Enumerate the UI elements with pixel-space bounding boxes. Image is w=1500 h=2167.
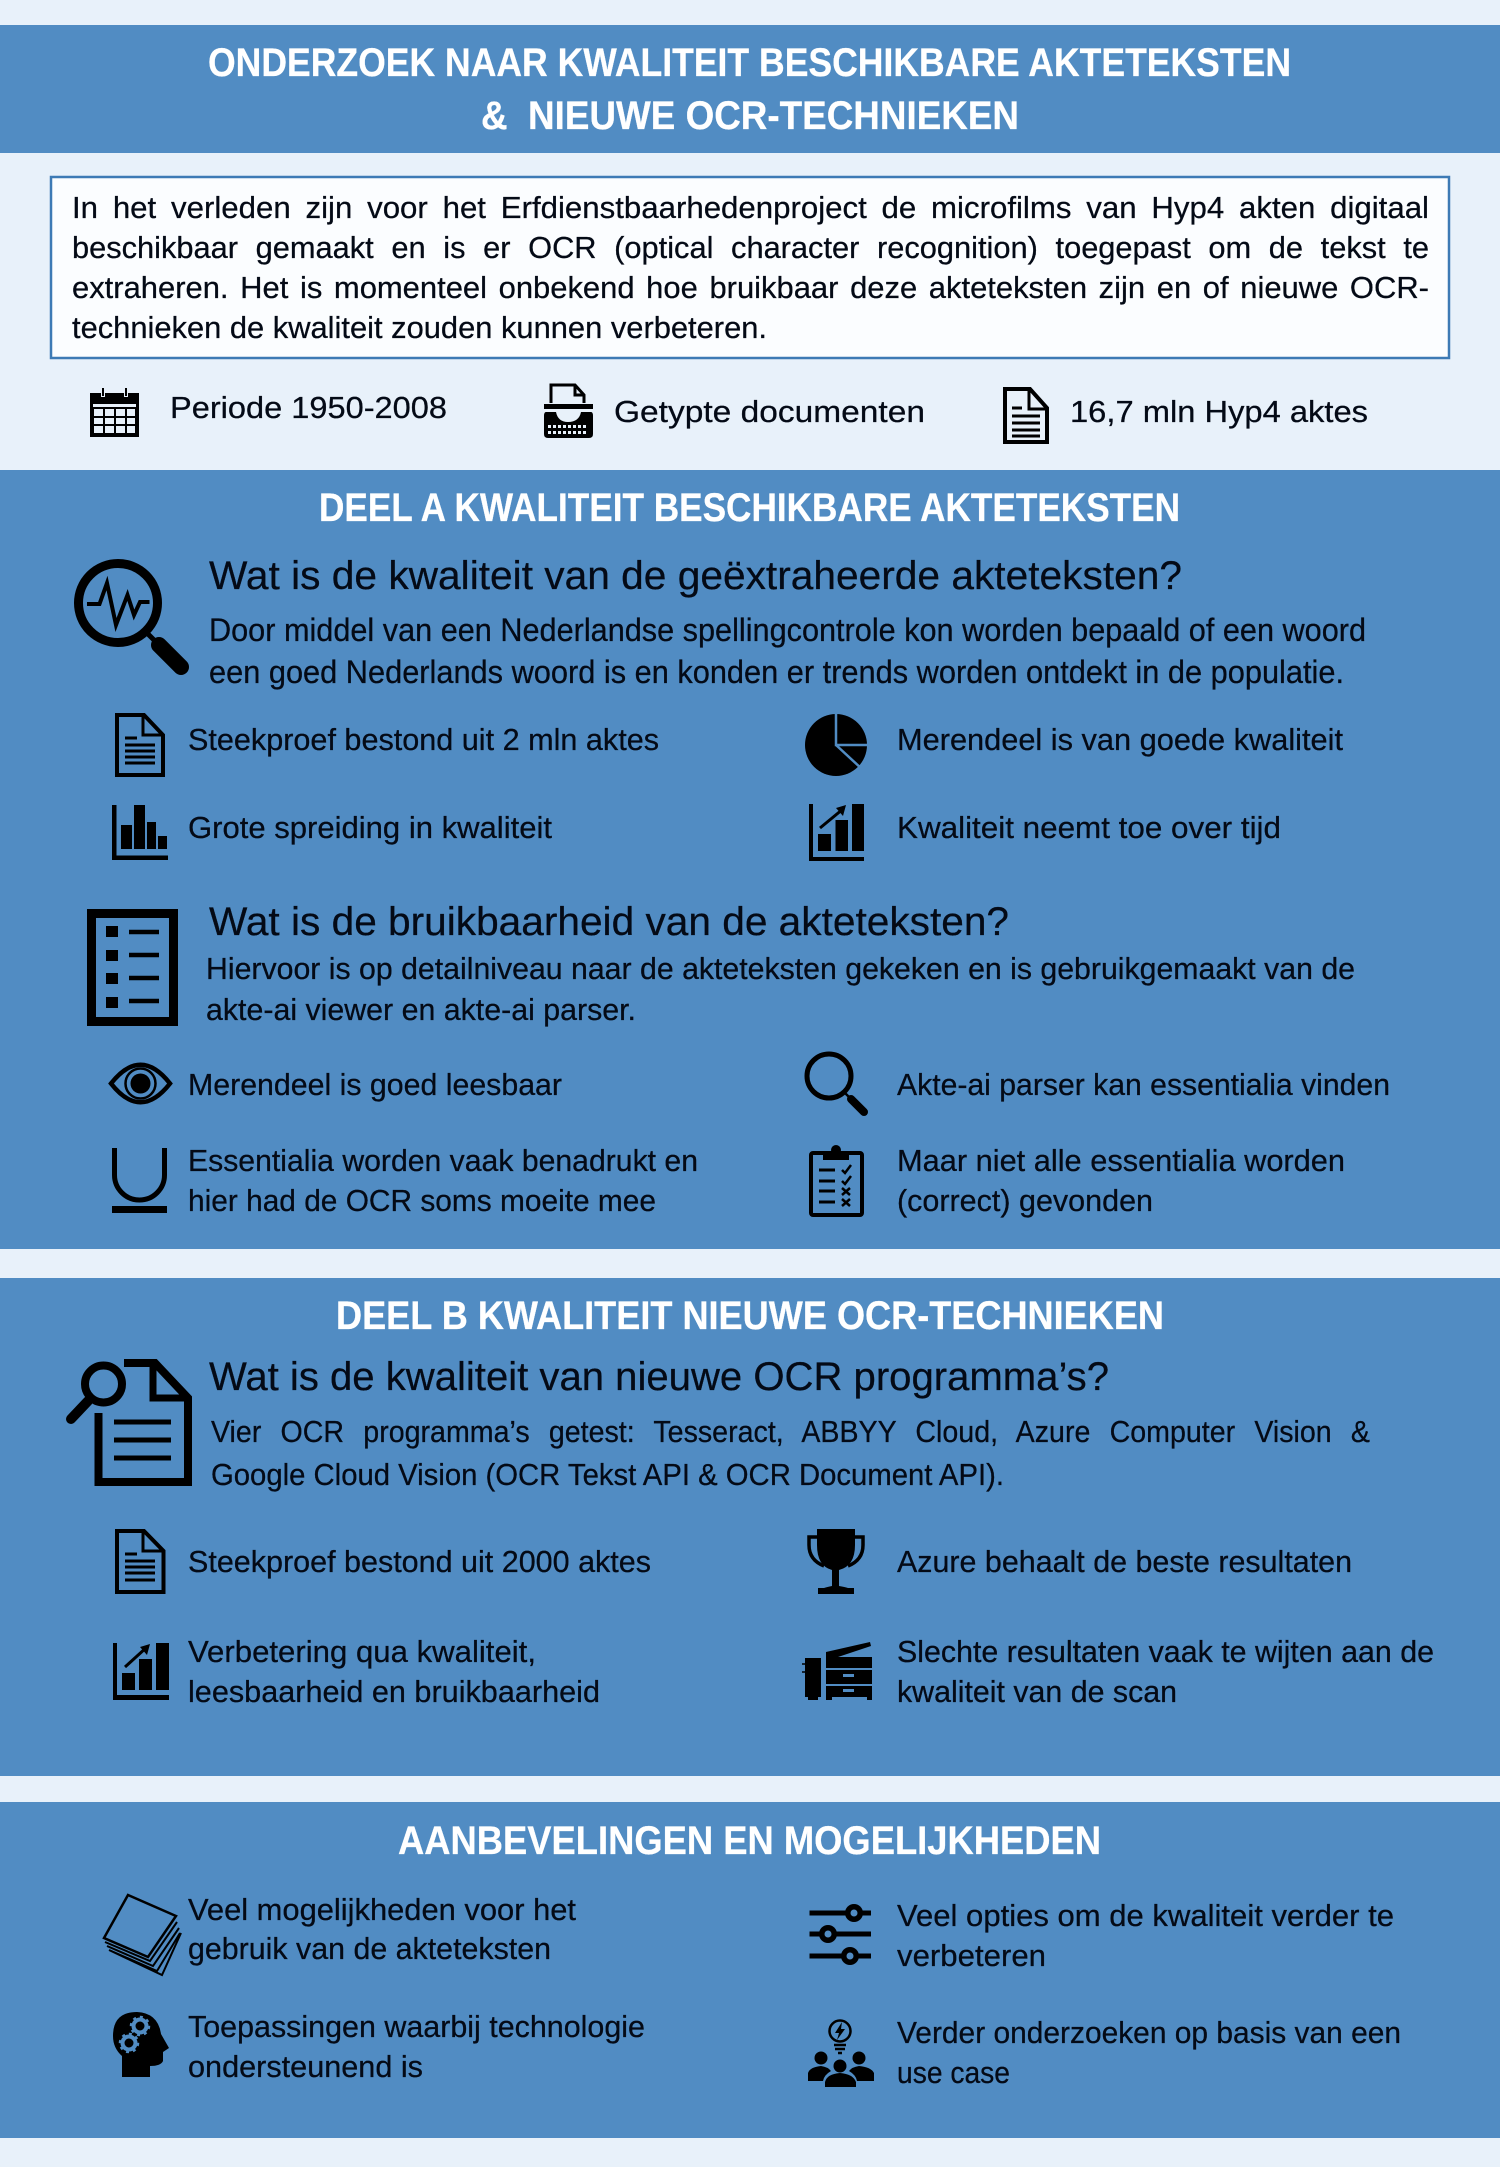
icon: document xyxy=(117,715,163,775)
item: essentialia benadrukt: Essentialia worden vaak benadrukt en xyxy=(188,1144,698,1178)
stat: getypte documenten: Getypte documenten xyxy=(614,395,925,429)
icon: checklist xyxy=(92,914,174,1022)
stat: aantal aktes: 16,7 mln Hyp4 aktes xyxy=(1070,395,1368,429)
panel: deel B xyxy=(0,1278,1500,1776)
item: verbetering xyxy=(113,1635,600,1709)
stat: periode xyxy=(90,388,447,437)
item: essentialia benadrukt xyxy=(112,1144,698,1218)
item: niet alle essentialia xyxy=(811,1144,1345,1218)
heading: aanbevelingen: AANBEVELINGEN EN MOGELIJKHEDEN xyxy=(398,1819,1101,1863)
text: vier programma's xyxy=(211,1415,1370,1492)
panel: aanbevelingen xyxy=(0,1802,1500,2138)
item: opties: Veel opties om de kwaliteit verder te xyxy=(897,1899,1394,1933)
icon: document with magnifier xyxy=(71,1362,190,1482)
intro text box: extraheren. Het is momenteel onbekend hoe bruikbaar deze akteteksten zijn en of nieuwe OCR- xyxy=(72,271,1429,305)
title banner: ONDERZOEK NAAR KWALITEIT BESCHIKBARE AKTETEKSTEN xyxy=(208,41,1291,85)
item: use case xyxy=(808,2016,1401,2090)
text: spellingcontrole: Door middel van een Nederlandse spellingcontrole kon worden bepaald of een woord xyxy=(209,612,1366,648)
item: merendeel goede kwaliteit: Merendeel is van goede kwaliteit xyxy=(897,723,1344,757)
heading: deel A: DEEL A KWALITEIT BESCHIKBARE AKTETEKSTEN xyxy=(319,486,1180,530)
item: merendeel goede kwaliteit xyxy=(805,713,1344,776)
intro text box: technieken de kwaliteit zouden kunnen verbeteren. xyxy=(72,311,767,345)
intro text box: beschikbaar gemaakt en is er OCR (optical character recognition) toegepast om de tekst te xyxy=(72,231,1429,265)
icon: sliders xyxy=(810,1904,871,1965)
icon: trophy xyxy=(809,1529,863,1594)
icon: calendar xyxy=(90,388,139,437)
question: nieuwe OCR programma's: Wat is de kwaliteit van nieuwe OCR programma’s? xyxy=(209,1355,1109,1399)
item: niet alle essentialia: Maar niet alle essentialia worden xyxy=(897,1144,1345,1178)
text: detailniveau: akte-ai viewer en akte-ai parser. xyxy=(206,993,636,1027)
heading: deel B: DEEL B KWALITEIT NIEUWE OCR-TECHNIEKEN xyxy=(336,1294,1164,1338)
text: detailniveau: Hiervoor is op detailniveau naar de akteteksten gekeken en is gebruikgemaakt van de xyxy=(206,952,1355,986)
text: detailniveau xyxy=(206,952,1355,1027)
intro text box xyxy=(51,177,1449,358)
item: opties xyxy=(810,1899,1394,1973)
item: steekproef 2000: Steekproef bestond uit 2000 aktes xyxy=(188,1545,651,1579)
item: kwaliteit neemt toe: Kwaliteit neemt toe over tijd xyxy=(897,811,1281,845)
icon: scanner xyxy=(802,1642,872,1700)
text: spellingcontrole xyxy=(209,612,1366,690)
item: grote spreiding: Grote spreiding in kwaliteit xyxy=(188,811,553,845)
icon: head with gears xyxy=(113,2012,169,2077)
icon: typewriter xyxy=(544,385,593,438)
icon: document xyxy=(1005,389,1047,442)
icon: rising bars xyxy=(809,804,864,861)
title banner xyxy=(0,25,1500,153)
text: vier programma's: Vier OCR programma’s getest: Tesseract, ABBYY Cloud, Azure Computer Vision & xyxy=(211,1415,1370,1449)
item: essentialia benadrukt: hier had de OCR soms moeite mee xyxy=(188,1184,656,1218)
item: toepassingen xyxy=(113,2010,645,2084)
icon: bar chart xyxy=(112,805,168,860)
panel: deel A xyxy=(0,470,1500,1249)
stat: aantal aktes xyxy=(1005,389,1368,442)
item: steekproef 2000 xyxy=(117,1531,651,1592)
item: steekproef 2 mln xyxy=(117,715,659,775)
icon: idea and people xyxy=(808,2020,874,2087)
item: use case: Verder onderzoeken op basis van een xyxy=(897,2016,1401,2050)
icon: pie chart xyxy=(805,713,868,776)
item: toepassingen: ondersteunend is xyxy=(188,2050,423,2084)
icon: document xyxy=(117,1531,164,1592)
icon: magnifier xyxy=(807,1054,864,1112)
item: goed leesbaar: Merendeel is goed leesbaar xyxy=(188,1068,562,1102)
item: Azure beste resultaten xyxy=(809,1529,1352,1594)
question: kwaliteit akteteksten: Wat is de kwaliteit van de geëxtraheerde akteteksten? xyxy=(209,554,1182,598)
icon: clipboard xyxy=(811,1145,862,1215)
item: steekproef 2 mln: Steekproef bestond uit 2 mln aktes xyxy=(188,723,659,757)
item: mogelijkheden: Veel mogelijkheden voor het xyxy=(188,1893,577,1927)
icon: stack of papers xyxy=(104,1895,181,1975)
item: Azure beste resultaten: Azure behaalt de beste resultaten xyxy=(897,1545,1352,1579)
stat: periode: Periode 1950-2008 xyxy=(170,391,447,425)
item: slechte resultaten: Slechte resultaten vaak te wijten aan de xyxy=(897,1635,1434,1669)
item: verbetering: Verbetering qua kwaliteit, xyxy=(188,1635,536,1669)
text: vier programma's: Google Cloud Vision (OCR Tekst API & OCR Document API). xyxy=(211,1458,1004,1492)
item: use case: use case xyxy=(897,2056,1010,2090)
item: opties: verbeteren xyxy=(897,1939,1046,1973)
item: mogelijkheden xyxy=(104,1893,577,1975)
item: verbetering: leesbaarheid en bruikbaarheid xyxy=(188,1675,600,1709)
item: toepassingen: Toepassingen waarbij technologie xyxy=(188,2010,645,2044)
icon: underline xyxy=(112,1148,167,1213)
item: mogelijkheden: gebruik van de akteteksten xyxy=(188,1932,551,1966)
item: grote spreiding xyxy=(112,805,553,860)
icon: eye xyxy=(111,1065,170,1102)
text: spellingcontrole: een goed Nederlands woord is en konden er trends worden ontdekt in de populatie. xyxy=(209,654,1344,690)
question: bruikbaarheid: Wat is de bruikbaarheid van de akteteksten? xyxy=(209,900,1009,944)
intro text box: In het verleden zijn voor het Erfdienstbaarhedenproject de microfilms van Hyp4 akten digitaal xyxy=(72,191,1429,225)
item: slechte resultaten: kwaliteit van de scan xyxy=(897,1675,1177,1709)
title banner: & NIEUWE OCR-TECHNIEKEN xyxy=(481,94,1019,138)
item: kwaliteit neemt toe xyxy=(809,804,1281,861)
item: parser vindt essentialia xyxy=(807,1054,1390,1112)
stat: getypte documenten xyxy=(544,385,925,438)
icon: magnifier with pulse xyxy=(78,564,181,667)
item: slechte resultaten xyxy=(802,1635,1434,1709)
item: parser vindt essentialia: Akte-ai parser kan essentialia vinden xyxy=(897,1068,1390,1102)
icon: rising bars xyxy=(113,1643,169,1700)
item: niet alle essentialia: (correct) gevonden xyxy=(897,1184,1153,1218)
